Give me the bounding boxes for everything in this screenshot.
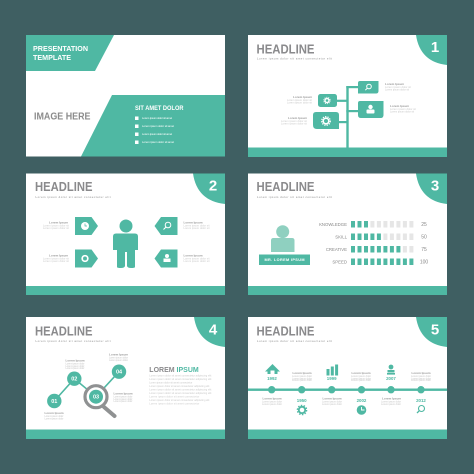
- timeline labels: Lorem ipsum dolor: [381, 400, 401, 404]
- panel: slide 1 tree diagram: [248, 35, 447, 157]
- timeline labels: Lorem Ipsum: [382, 396, 401, 400]
- labels: Lorem ipsum dolor sit: [281, 122, 307, 126]
- labels: Lorem Ipsum: [390, 104, 409, 108]
- skill row: skill: 50: [421, 235, 427, 241]
- labels: Lorem ipsum dolor sit: [43, 256, 69, 260]
- timeline labels: Lorem ipsum dolor: [262, 402, 282, 406]
- subtitle: Lorem ipsum dolor sit amet consectetur elit: [36, 195, 111, 199]
- years: 1992: [267, 376, 277, 381]
- checklist: Lorem ipsum dolor sit amet: [142, 124, 174, 128]
- timeline labels: Lorem ipsum dolor: [411, 374, 431, 378]
- labels: Lorem ipsum dolor sit: [184, 226, 210, 230]
- paragraph: Lorem ipsum dolor sit amet consectetur adipiscing elit: [149, 391, 212, 395]
- heading: presentation template: PRESENTATION: [33, 44, 88, 53]
- timeline labels: Lorem ipsum dolor: [411, 376, 431, 380]
- icon: bar chart: [326, 364, 338, 376]
- timeline labels: Lorem Ipsum: [262, 396, 282, 400]
- labels: Lorem Ipsum: [385, 82, 404, 86]
- step labels: Lorem ipsum dolor: [44, 414, 64, 418]
- timeline labels: Lorem ipsum dolor: [262, 400, 282, 404]
- labels: Lorem Ipsum: [288, 116, 307, 120]
- tag: search: [154, 217, 178, 235]
- heading: presentation template: TEMPLATE: [33, 53, 71, 62]
- step 02: 02: [71, 377, 77, 383]
- timeline labels: Lorem ipsum dolor: [411, 378, 431, 382]
- checklist: Lorem ipsum dolor sit amet: [142, 140, 174, 144]
- name plate: MR. LOREM IPSUM: [264, 258, 304, 262]
- timeline labels: [262, 371, 431, 406]
- skill row: skill: SKILL: [335, 234, 348, 240]
- step labels: Lorem ipsum dolor: [44, 416, 64, 420]
- skill row: creative: CREATIVE: [326, 247, 347, 252]
- step labels: Lorem Ipsum: [66, 358, 85, 362]
- subtitle: Lorem ipsum dolor sit amet consectetur elit: [36, 339, 111, 343]
- number badge 4: [194, 317, 225, 347]
- skill row: knowledge: [319, 221, 427, 228]
- panel: title slide: [26, 35, 225, 156]
- tag: clock: [75, 217, 98, 235]
- icon: profile: [271, 225, 294, 252]
- step labels: Lorem ipsum dolor: [114, 399, 133, 403]
- heading: lorem ipsum: LOREM IPSUM: [149, 367, 199, 374]
- icon box: large gear: [313, 112, 339, 129]
- panel: slide 2 person with tags: [26, 174, 225, 295]
- icon: house: [265, 364, 280, 374]
- number badge 3: [416, 174, 447, 204]
- paragraph: Lorem ipsum dolor sit amet consectetur: [149, 394, 199, 398]
- headline: HEADLINE: [35, 324, 93, 338]
- timeline labels: Lorem ipsum dolor: [292, 374, 312, 378]
- step labels: Lorem ipsum dolor: [66, 362, 85, 366]
- labels: Lorem Ipsum: [184, 254, 203, 258]
- step 04: 04: [116, 370, 123, 376]
- headline: HEADLINE: [256, 179, 315, 194]
- timeline labels: Lorem ipsum dolor: [292, 378, 312, 382]
- timeline line and nodes: [248, 386, 447, 393]
- years: 2012: [416, 398, 426, 403]
- labels: Lorem Ipsum: [293, 95, 312, 99]
- step labels: [44, 352, 133, 420]
- labels: Lorem ipsum dolor sit: [43, 226, 69, 230]
- tag: gear: [75, 250, 98, 268]
- timeline labels: Lorem Ipsum: [412, 371, 431, 375]
- name plate: [259, 254, 310, 265]
- years: 2002: [357, 398, 367, 403]
- labels: Lorem ipsum dolor sit: [287, 100, 312, 104]
- skill row: creative: [326, 246, 427, 253]
- paragraph: Lorem ipsum dolor sit amet consectetur: [149, 380, 192, 384]
- step labels: Lorem ipsum dolor: [114, 397, 133, 401]
- panel: slide 4 magnifier steps: [26, 317, 225, 439]
- number badge 4: 4: [209, 322, 218, 338]
- labels: Lorem ipsum dolor sit: [184, 256, 210, 260]
- labels: Lorem Ipsum: [49, 220, 68, 224]
- labels: [43, 220, 210, 263]
- step 01: [47, 394, 62, 408]
- number badge 5: 5: [431, 322, 439, 338]
- paragraph: Lorem ipsum dolor sit amet consectetur adipiscing elit: [149, 384, 210, 388]
- number badge 5: [416, 317, 447, 347]
- timeline labels: Lorem Ipsum: [292, 371, 312, 375]
- step labels: Lorem ipsum dolor: [114, 394, 133, 398]
- skill row: creative: 75: [421, 247, 427, 253]
- subtitle: Lorem ipsum dolor sit amet consectetur elit: [257, 56, 332, 60]
- headline: HEADLINE: [35, 179, 93, 194]
- labels: Lorem ipsum dolor sit: [390, 110, 414, 114]
- step labels: Lorem Ipsum: [109, 352, 128, 356]
- checklist: Lorem ipsum dolor sit amet: [142, 116, 172, 120]
- labels: Lorem Ipsum: [184, 220, 203, 224]
- step 02: [67, 372, 82, 386]
- paragraph: Lorem ipsum dolor sit amet consectetur adipiscing elit: [149, 388, 212, 392]
- skill row: skill: [335, 234, 427, 241]
- labels: Lorem ipsum dolor sit: [385, 85, 411, 89]
- checklist: Lorem ipsum dolor sit amet: [142, 132, 172, 136]
- icon: search: [417, 406, 424, 413]
- timeline labels: Lorem ipsum dolor: [351, 378, 371, 382]
- skill row: speed: [332, 258, 428, 266]
- icon: gear: [297, 405, 307, 415]
- tag: user: [154, 250, 178, 268]
- panel: slide 3 skill bars: [248, 174, 447, 295]
- paragraph: Lorem ipsum dolor sit amet consectetur adipiscing elit: [149, 377, 212, 381]
- labels: Lorem ipsum dolor sit: [390, 107, 416, 111]
- years: 1950: [297, 398, 307, 403]
- panel: slide 5 timeline: [248, 317, 447, 439]
- years: 1999: [327, 376, 337, 381]
- paragraph: [149, 374, 212, 406]
- text: sit amet dolor: SIT AMET DOLOR: [135, 105, 184, 112]
- number badge 2: [193, 174, 225, 204]
- step labels: Lorem Ipsum: [44, 411, 64, 415]
- step labels: Lorem ipsum dolor: [109, 358, 128, 362]
- skill row: knowledge: 25: [421, 222, 427, 228]
- icon: person: [113, 220, 138, 268]
- timeline labels: Lorem Ipsum: [352, 371, 371, 375]
- labels: Lorem ipsum dolor sit: [43, 224, 69, 228]
- text: image here: IMAGE HERE: [34, 110, 90, 122]
- step 03: 03: [93, 395, 99, 401]
- tree trunk and branches: [336, 86, 358, 148]
- magnifier: [85, 386, 114, 416]
- skill row: knowledge: KNOWLEDGE: [319, 222, 347, 227]
- number badge 1: 1: [431, 39, 439, 56]
- labels: Lorem ipsum dolor sit: [184, 224, 210, 228]
- headline: HEADLINE: [256, 42, 315, 56]
- paragraph: Lorem ipsum dolor sit amet consectetur adipiscing elit: [149, 374, 212, 378]
- skill row: speed: 100: [420, 260, 428, 266]
- timeline labels: Lorem ipsum dolor: [351, 374, 371, 378]
- timeline labels: Lorem ipsum dolor: [381, 402, 401, 406]
- paragraph: Lorem ipsum dolor sit amet consectetur: [149, 402, 199, 406]
- subtitle: Lorem ipsum dolor sit amet consectetur elit: [257, 195, 332, 199]
- paragraph: Lorem ipsum dolor sit amet consectetur adipiscing elit: [149, 398, 210, 402]
- subtitle: Lorem ipsum dolor sit amet consectetur elit: [257, 339, 332, 343]
- checklist: [135, 116, 174, 144]
- step labels: Lorem ipsum dolor: [66, 364, 85, 368]
- step labels: Lorem ipsum dolor: [66, 366, 85, 370]
- heading: presentation template: [33, 44, 88, 62]
- connector line: [54, 372, 119, 401]
- skill row: speed: SPEED: [332, 260, 347, 264]
- timeline labels: Lorem ipsum dolor: [322, 400, 342, 404]
- labels: Lorem ipsum dolor sit: [43, 259, 69, 263]
- labels: [281, 82, 416, 126]
- step 04: [112, 364, 126, 379]
- number badge 3: 3: [431, 178, 439, 194]
- timeline labels: Lorem Ipsum: [322, 396, 342, 400]
- icon: user: [387, 365, 395, 375]
- icon: pie clock: [357, 405, 366, 415]
- timeline labels: Lorem ipsum dolor: [292, 376, 312, 380]
- labels: Lorem Ipsum: [49, 254, 68, 258]
- step labels: Lorem ipsum dolor: [109, 356, 128, 360]
- step labels: Lorem Ipsum: [114, 392, 133, 396]
- number badge 1: [416, 35, 447, 65]
- years: 2007: [386, 376, 396, 381]
- timeline labels: Lorem ipsum dolor: [351, 376, 371, 380]
- icon box: search: [358, 81, 378, 94]
- headline: HEADLINE: [256, 324, 315, 338]
- icon box: small gear: [318, 94, 337, 107]
- timeline labels: Lorem ipsum dolor: [322, 402, 342, 406]
- labels: Lorem ipsum dolor sit: [385, 88, 409, 92]
- labels: Lorem ipsum dolor sit: [287, 98, 312, 102]
- labels: Lorem ipsum dolor sit: [184, 259, 210, 263]
- years: [267, 376, 426, 403]
- step 03: [89, 390, 103, 404]
- number badge 2: 2: [209, 178, 217, 194]
- step 01: 01: [51, 399, 57, 405]
- labels: Lorem ipsum dolor sit: [281, 119, 307, 123]
- icon box: user: [358, 101, 384, 118]
